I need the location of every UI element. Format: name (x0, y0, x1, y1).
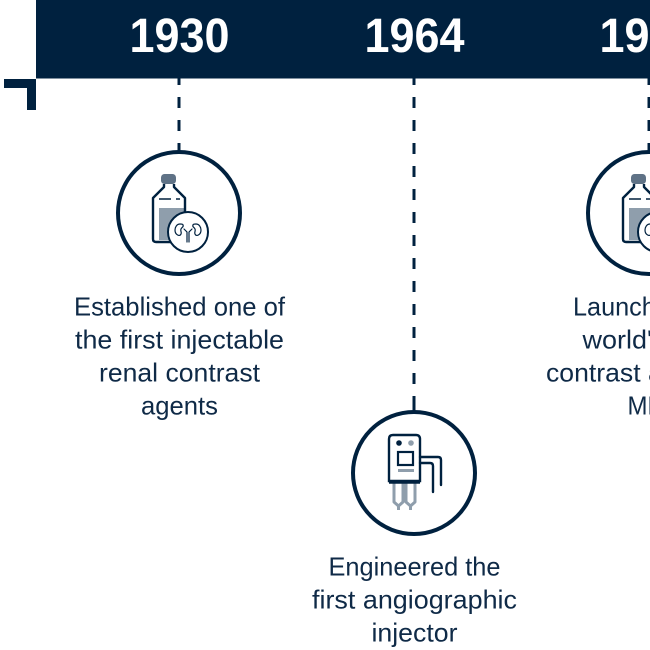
dashed connector 1930 (178, 78, 180, 151)
dashed connector 1964 (412, 78, 416, 411)
text: 1930 description: renal contrast (99, 358, 261, 388)
text: 1964 description: first angiographic (312, 584, 517, 614)
icon: contrast bottle, cropped (588, 152, 650, 274)
text: 1930 description: agents (141, 390, 218, 420)
dashed connector third column (648, 78, 650, 151)
year 1930: 1930 (130, 10, 230, 63)
text: 1930 description (74, 292, 286, 420)
tubes (420, 457, 441, 492)
text: third column description, cropped (546, 292, 650, 420)
text: 1930 description: the first injectable (75, 324, 284, 354)
header band (36, 0, 650, 78)
text: 1964 description: Engineered the (328, 552, 500, 582)
year 1964: 1964 (364, 10, 465, 63)
corner bracket (4, 79, 36, 110)
syringes (394, 481, 415, 510)
text: 1964 description (312, 552, 517, 648)
text: 1964 description: injector (372, 618, 458, 648)
icon: contrast bottle with kidneys (118, 152, 240, 274)
icon: angiographic injector (353, 412, 475, 534)
text: 1930 description: Established one of (74, 292, 286, 322)
injector body (389, 435, 420, 481)
